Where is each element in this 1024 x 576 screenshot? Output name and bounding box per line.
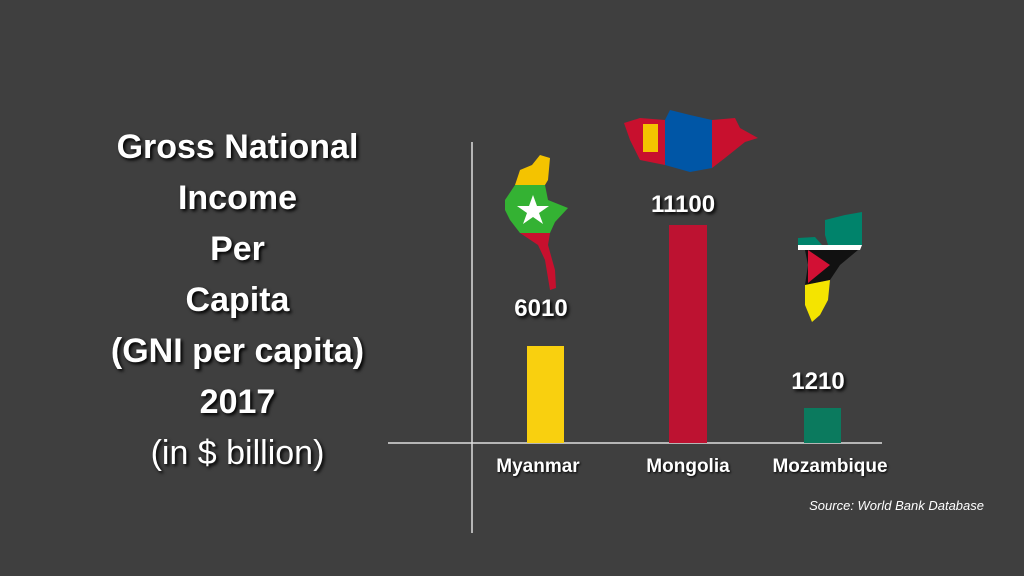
bar: Mongolia <box>669 225 707 443</box>
title: Income <box>178 179 297 217</box>
value labels: 6010 <box>514 295 568 322</box>
title: 2017 <box>200 383 275 421</box>
title: Gross National <box>117 128 358 166</box>
icon: Mozambique map <box>798 212 862 322</box>
title: Capita <box>186 281 289 319</box>
title: Per <box>210 230 265 268</box>
title: (in $ billion) <box>151 434 324 472</box>
source: Source: World Bank Database <box>809 498 984 513</box>
text: Mongolia <box>646 456 730 477</box>
title <box>111 128 366 474</box>
category labels: Myanmar <box>496 456 580 477</box>
text: 11100 <box>651 191 715 218</box>
text: 1210 <box>791 368 845 395</box>
title: (GNI per capita) <box>111 332 364 370</box>
icon: Myanmar map <box>505 155 568 290</box>
bar: Myanmar <box>527 346 564 443</box>
icon: Mongolia map <box>624 110 758 172</box>
bar: Mozambique <box>804 408 841 443</box>
text: Mozambique <box>772 456 888 477</box>
